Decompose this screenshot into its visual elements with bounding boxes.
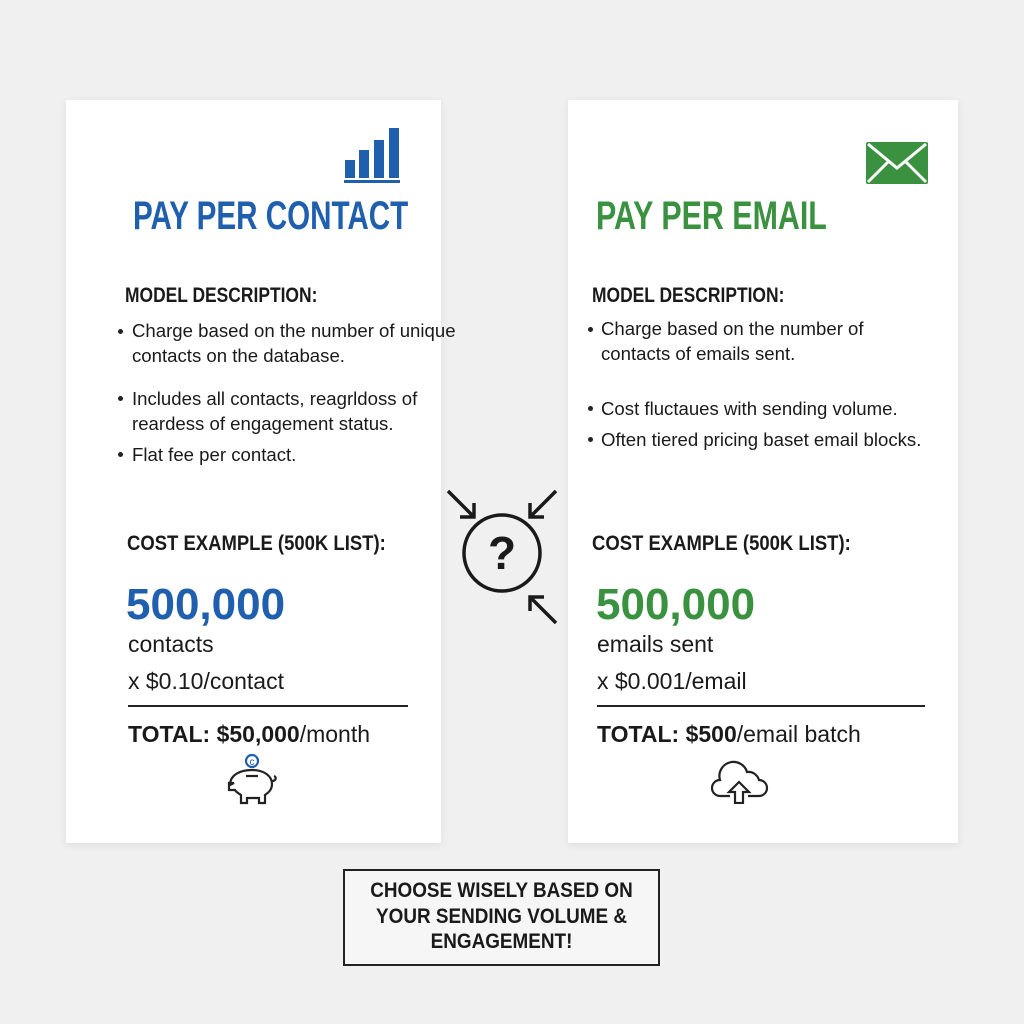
text block: cost example <box>592 532 925 747</box>
icon: envelope <box>866 142 928 184</box>
callout: CHOOSE WISELY BASED ON <box>370 879 633 902</box>
text block: cost example: x $0.001/email <box>597 668 747 694</box>
text block: model description <box>118 284 456 465</box>
callout: ENGAGEMENT! <box>431 930 572 953</box>
text block: model description: Includes all contacts, reagrldoss of <box>132 388 417 409</box>
text block: model description: MODEL DESCRIPTION: <box>125 284 317 307</box>
callout <box>343 869 660 966</box>
text block: cost example <box>126 532 408 747</box>
text block: model description: contacts on the database. <box>132 345 345 366</box>
icon: piggy bank: c <box>250 757 254 768</box>
icon: question with arrows: ? <box>488 527 516 579</box>
text block: cost example: COST EXAMPLE (500K LIST): <box>592 532 851 555</box>
text block: cost example: contacts <box>128 631 214 657</box>
text block: model description <box>588 284 921 450</box>
text block: cost example: TOTAL: $50,000/month <box>128 721 370 747</box>
text block: model description: Often tiered pricing baset email blocks. <box>601 429 921 450</box>
callout: YOUR SENDING VOLUME & <box>376 904 627 928</box>
panel: pay per email <box>568 100 958 843</box>
text block: cost example: 500,000 <box>126 580 285 629</box>
icon: piggy bank <box>228 754 277 804</box>
heading: PAY PER EMAIL <box>596 194 827 238</box>
text block: model description: Charge based on the number of <box>601 318 864 339</box>
text block: model description: Flat fee per contact. <box>132 444 296 465</box>
text block: model description: reardess of engagement status. <box>132 413 394 434</box>
text block: cost example: 500,000 <box>596 580 755 629</box>
text block: model description: Charge based on the number of unique <box>132 320 456 341</box>
heading: PAY PER CONTACT <box>133 194 408 238</box>
text block: model description: contacts of emails sent. <box>601 343 795 364</box>
icon: question with arrows <box>446 490 558 624</box>
text block: model description: Cost fluctaues with sending volume. <box>601 398 898 419</box>
icon: bar chart <box>344 128 400 183</box>
text block: cost example: emails sent <box>597 631 713 657</box>
text block: cost example: COST EXAMPLE (500K LIST): <box>127 532 386 555</box>
panel: pay per contact <box>66 100 441 843</box>
text block: model description: MODEL DESCRIPTION: <box>592 284 784 307</box>
icon: cloud upload <box>710 760 768 804</box>
text block: cost example: x $0.10/contact <box>128 668 284 694</box>
text block: cost example: TOTAL: $500/email batch <box>597 721 861 747</box>
